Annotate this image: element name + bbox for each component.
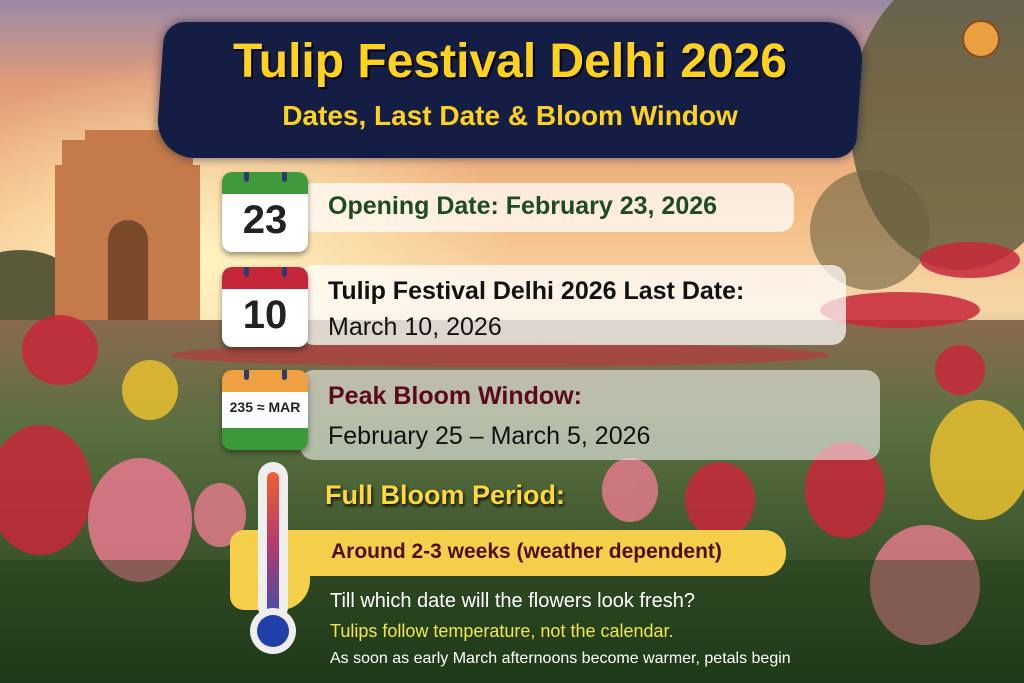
title: Tulip Festival Delhi 2026	[233, 35, 787, 88]
subtitle: Dates, Last Date & Bloom Window	[282, 100, 738, 131]
text: peak bloom: Peak Bloom Window:	[328, 382, 582, 410]
trees right	[850, 0, 1024, 270]
text: last date: Tulip Festival Delhi 2026 Last Date:	[328, 277, 744, 305]
text: fresh question: Till which date will the flowers look fresh?	[330, 590, 695, 612]
text: opening date: Opening Date: February 23, 2026	[328, 192, 717, 220]
logo	[962, 20, 1000, 58]
yellow callout band	[230, 530, 786, 610]
text: last date: March 10, 2026	[328, 313, 502, 341]
row: opening date	[218, 171, 794, 259]
heading: full bloom period: Full Bloom Period:	[325, 480, 565, 510]
text: temperature note: Tulips follow temperature, not the calendar.	[330, 621, 674, 641]
text: last date	[328, 277, 744, 341]
India Gate	[55, 130, 200, 325]
row: peak bloom	[220, 370, 880, 460]
title banner	[155, 22, 865, 158]
text: peak bloom	[328, 382, 650, 450]
text: peak bloom: February 25 – March 5, 2026	[328, 422, 650, 450]
text: duration: Around 2-3 weeks (weather dependent)	[331, 540, 722, 563]
row: last date	[218, 265, 846, 354]
icon: calendar MAR	[222, 370, 308, 450]
icon: thermometer	[250, 462, 296, 654]
text: march note: As soon as early March afternoons become warmer, petals begin	[330, 650, 791, 667]
icon: calendar 23	[222, 172, 308, 252]
icon: calendar 10: 10	[243, 293, 287, 337]
icon: calendar 23: 23	[243, 198, 287, 242]
icon: calendar 10	[222, 267, 308, 347]
icon: calendar MAR: 235 ≈ MAR	[230, 399, 300, 415]
